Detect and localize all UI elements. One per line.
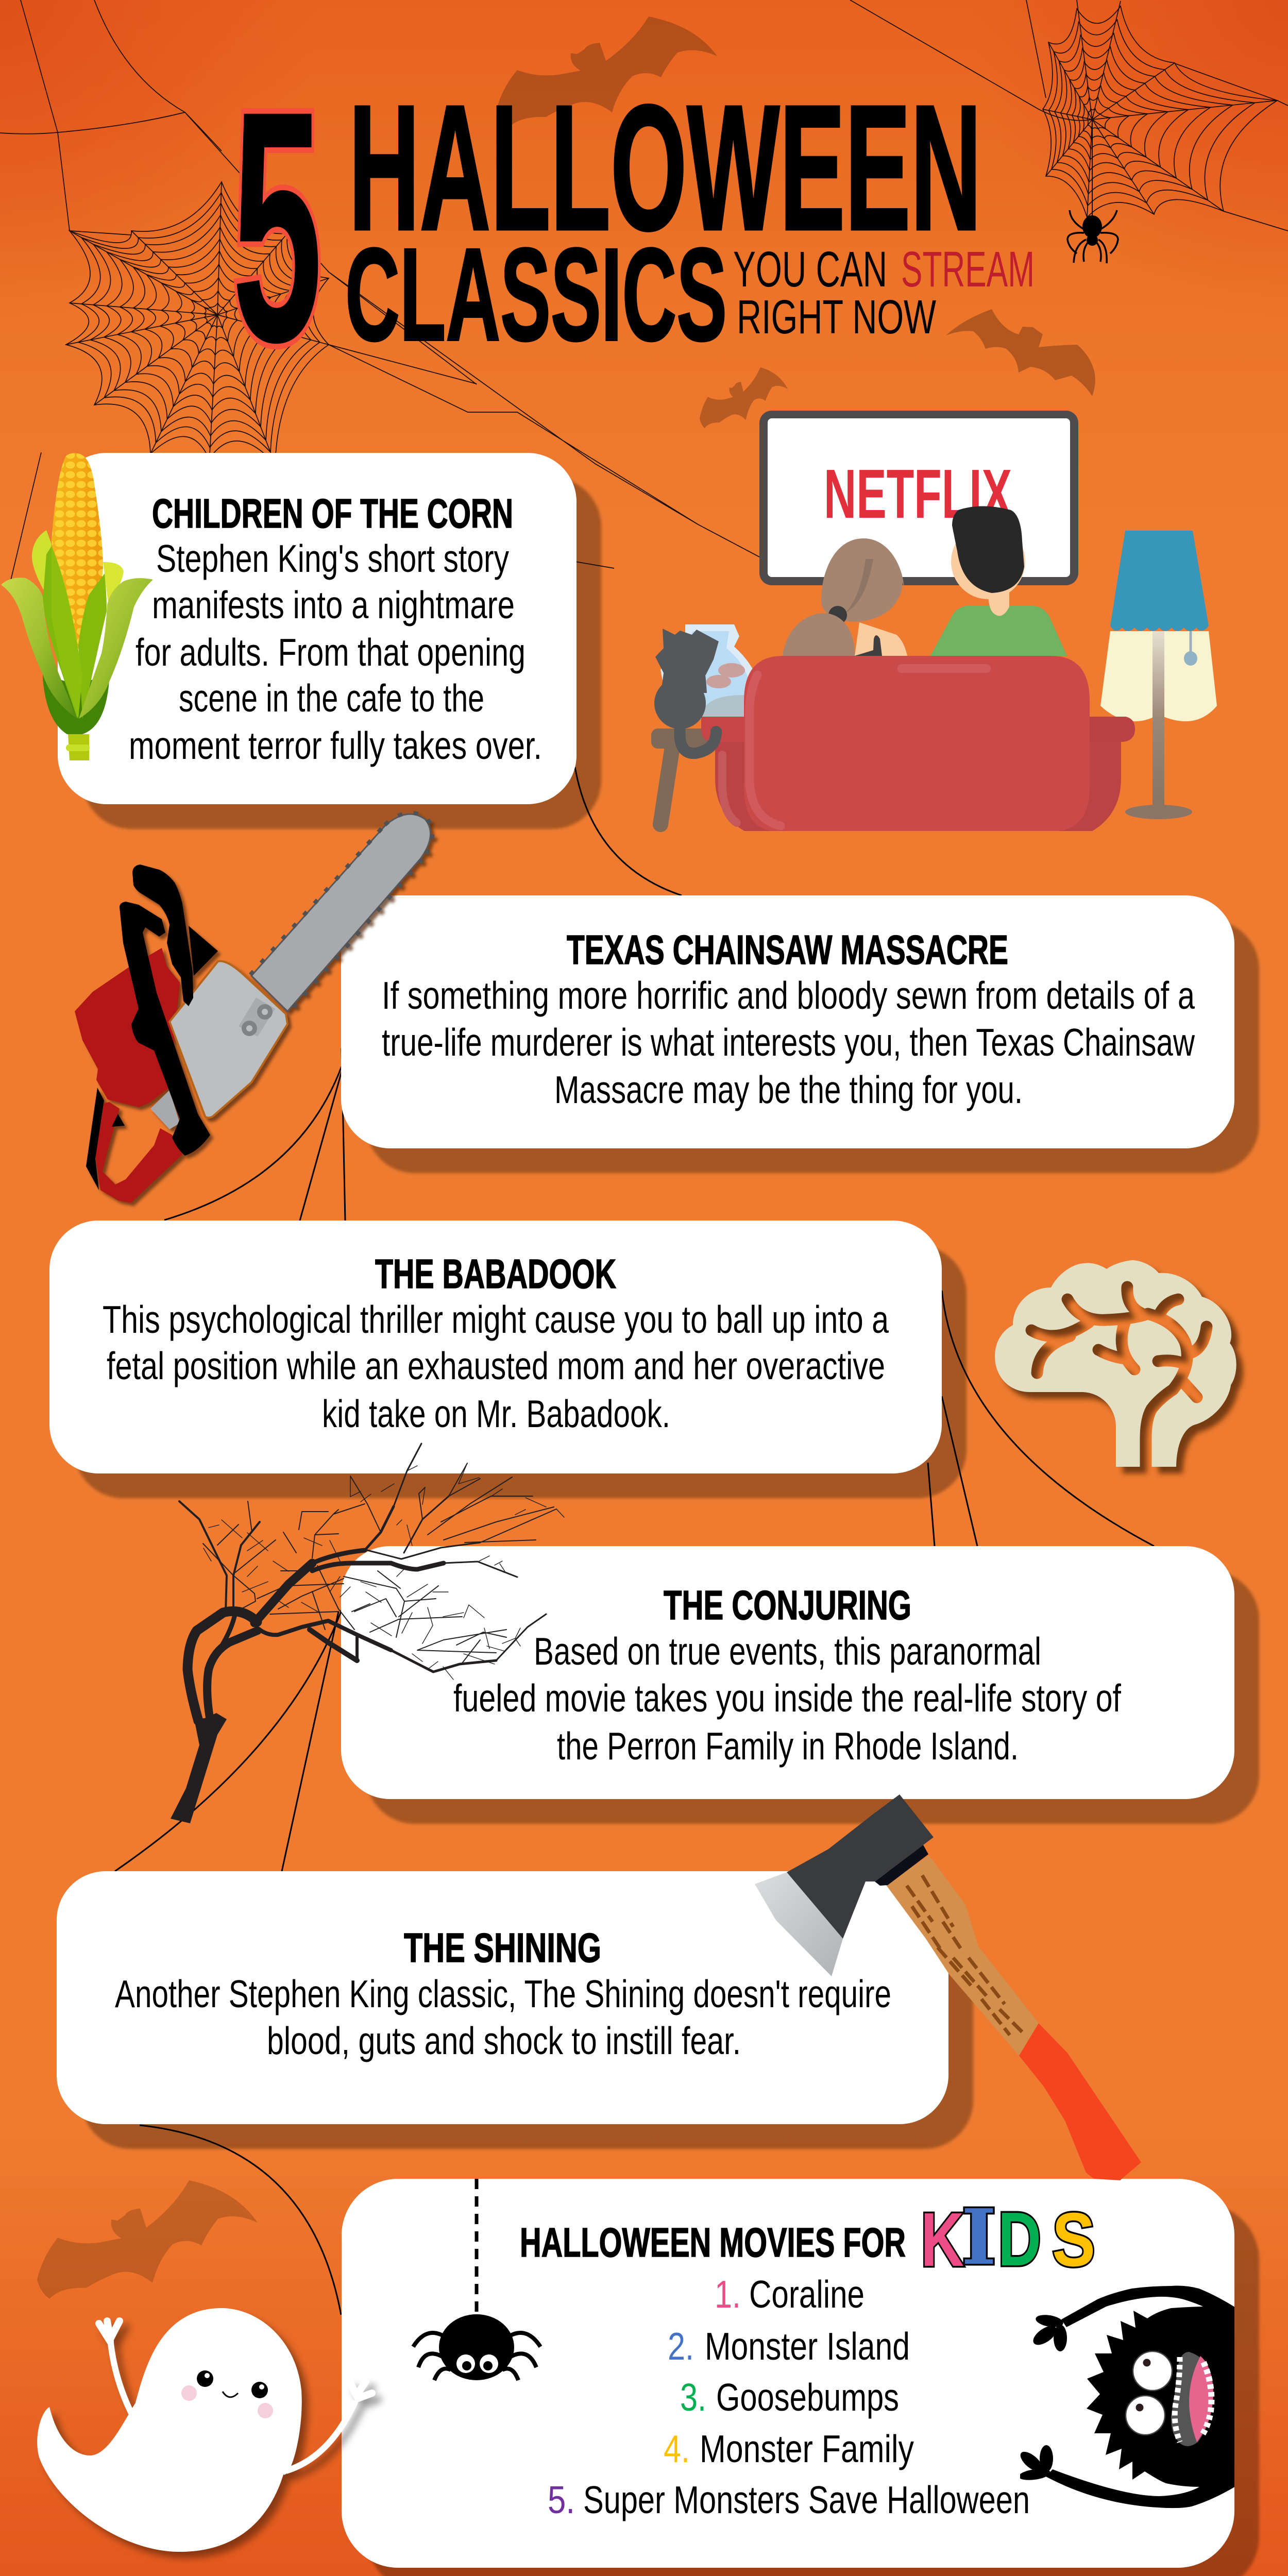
body: The Shining: Another Stephen King classic, The Shining doesn't require [115,1972,891,2015]
icon: brain [995,1260,1236,1467]
list of kids movies [548,2273,1030,2521]
list of kids movies: Coraline [749,2273,865,2316]
list of kids movies: 4. [664,2427,690,2470]
heading: KIDS: D [998,2197,1041,2282]
body: Texas Chainsaw Massacre [382,974,1195,1111]
list of kids movies: 5. [548,2478,575,2521]
lamp [1100,531,1217,819]
stool [651,728,713,824]
icon: ghost [37,2308,372,2552]
heading: KIDS: I [961,2192,996,2282]
panel: The Babadook [49,1221,942,1473]
monster hands [1017,2313,1067,2482]
body: The Babadook: kid take on Mr. Babadook. [322,1392,670,1435]
list of kids movies: 2. [668,2325,694,2368]
heading: Halloween movies for: HALLOWEEN MOVIES FOR [520,2219,906,2265]
panel: Halloween movies for kids [342,2179,1234,2568]
woman [783,538,907,656]
body: The Babadook: fetal position while an exhausted mom and her overactive [107,1344,885,1387]
body: Texas Chainsaw Massacre: Massacre may be the thing for you. [554,1068,1023,1111]
icon: black monster [1017,2286,1236,2508]
list of kids movies: Goosebumps [716,2376,899,2419]
hanging spider: top right [1067,120,1118,263]
icon: corn [1,453,153,760]
bat: top [497,16,717,127]
monster eyes [1133,2351,1172,2391]
list of kids movies: 3. [680,2376,706,2419]
body: Children of the Corn: manifests into a nightmare [152,583,515,626]
icon: bare tree [171,1444,564,1823]
heading: The Conjuring: THE CONJURING [664,1582,911,1628]
chainsaw grey housing [170,961,287,1118]
bat: bottom left [37,2180,258,2299]
heading: The Shining: THE SHINING [404,1925,601,1971]
panel: Children of the Corn [58,453,577,804]
heading: The Babadook: THE BABADOOK [375,1251,616,1297]
body: The Conjuring: Based on true events, this paranormal [534,1630,1041,1673]
bat: right [946,309,1095,396]
panel: The Shining [57,1871,948,2124]
connecting web threads [115,767,1154,2315]
cobweb: left [0,0,759,582]
body: The Babadook: This psychological thriller might cause you to ball up into a [103,1298,889,1341]
axe handle [886,1855,1039,2056]
fish bowl [660,624,759,719]
bat: small [700,367,788,428]
body: Children of the Corn: Stephen King's short story [156,537,509,580]
tv [759,411,1078,585]
heading: KIDS: S [1052,2197,1095,2282]
title: you can stream: YOU CAN [733,241,887,297]
chainsaw bar [251,814,431,1011]
icon: dangling spider [413,2179,540,2380]
axe head [875,1845,928,1886]
icon: chainsaw [75,813,432,1203]
body: Children of the Corn [129,537,542,767]
title: right now: RIGHT NOW [737,290,936,344]
body: The Shining: blood, guts and shock to instill fear. [267,2019,741,2062]
cat [654,629,719,753]
heading: Children of the Corn: CHILDREN OF THE CORN [152,490,513,536]
cobweb: top right [850,0,1288,231]
title: CLASSICS: CLASSICS [345,221,727,368]
chainsaw black handles [132,865,193,1006]
heading: Texas Chainsaw Massacre: TEXAS CHAINSAW MASSACRE [567,927,1008,973]
chainsaw rear handle [95,1102,182,1203]
body: Children of the Corn: scene in the cafe to the [179,676,484,720]
list of kids movies: 1. [715,2273,741,2316]
heading: KIDS: K [921,2197,964,2282]
body: The Conjuring: the Perron Family in Rhode Island. [557,1724,1019,1768]
panel: Texas Chainsaw Massacre [341,895,1234,1148]
chainsaw red body [75,948,180,1107]
list of kids movies: Super Monsters Save Halloween [583,2478,1030,2521]
body: The Conjuring: fueled movie takes you inside the real-life story of [453,1676,1121,1720]
panel: The Conjuring [341,1546,1234,1799]
body: Children of the Corn: moment terror fully takes over. [129,724,542,767]
red couch [701,656,1135,831]
axe blade [755,1872,843,1976]
man [930,506,1067,656]
monster mouth [1171,2352,1213,2446]
tv: NETFLIX [824,455,1012,533]
body: The Babadook [103,1298,889,1435]
list of kids movies: Monster Family [700,2427,914,2470]
body: The Shining [115,1972,891,2062]
icon: axe [755,1794,1141,2180]
body: Children of the Corn: for adults. From that opening [135,631,526,674]
card shadows [74,478,1259,2576]
text: 5 [232,42,323,411]
list of kids movies: Monster Island [705,2325,910,2368]
heading: KIDS [921,2192,1095,2282]
body: The Conjuring [453,1630,1121,1768]
illustration: couple watching Netflix [651,411,1217,831]
title: you can stream: STREAM [901,241,1035,297]
